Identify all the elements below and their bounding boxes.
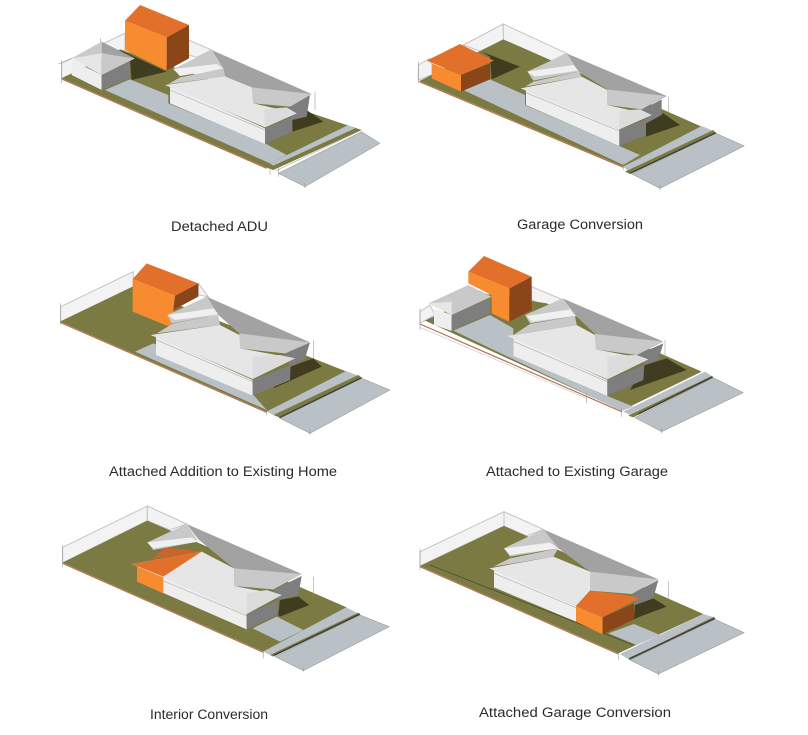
main house xyxy=(132,524,302,629)
main house xyxy=(521,53,667,146)
caption: Detached ADU xyxy=(171,219,268,234)
panel: attached addition xyxy=(60,263,390,479)
main house xyxy=(489,529,658,622)
site drawing: interior conversion xyxy=(63,506,389,672)
panel: garage conversion xyxy=(418,24,744,232)
site drawing: attached addition xyxy=(60,263,390,435)
main house xyxy=(165,50,312,144)
site drawing: detached ADU xyxy=(58,5,380,188)
garage xyxy=(428,285,492,331)
site drawing: garage conversion xyxy=(418,24,744,190)
garage xyxy=(72,42,135,90)
caption: Attached Garage Conversion xyxy=(479,705,671,720)
panel: interior conversion xyxy=(63,506,389,722)
panel: attached garage conversion xyxy=(420,512,744,720)
main house xyxy=(151,297,310,396)
caption: Attached Addition to Existing Home xyxy=(109,464,337,479)
panel: attached to existing garage xyxy=(420,256,743,479)
orange garage conversion xyxy=(427,44,494,92)
orange interior conversion xyxy=(132,547,202,593)
orange ADU attached to garage xyxy=(468,256,532,322)
caption: Interior Conversion xyxy=(150,707,268,722)
caption: Garage Conversion xyxy=(517,217,643,232)
panel: detached ADU xyxy=(58,5,380,234)
site drawing: attached garage conversion xyxy=(420,512,744,676)
orange detached ADU xyxy=(125,5,189,71)
orange attached addition xyxy=(133,263,198,328)
site drawing: attached to garage xyxy=(420,256,743,433)
caption: Attached to Existing Garage xyxy=(486,464,668,479)
orange attached garage conversion xyxy=(576,591,639,634)
main house xyxy=(507,298,663,396)
